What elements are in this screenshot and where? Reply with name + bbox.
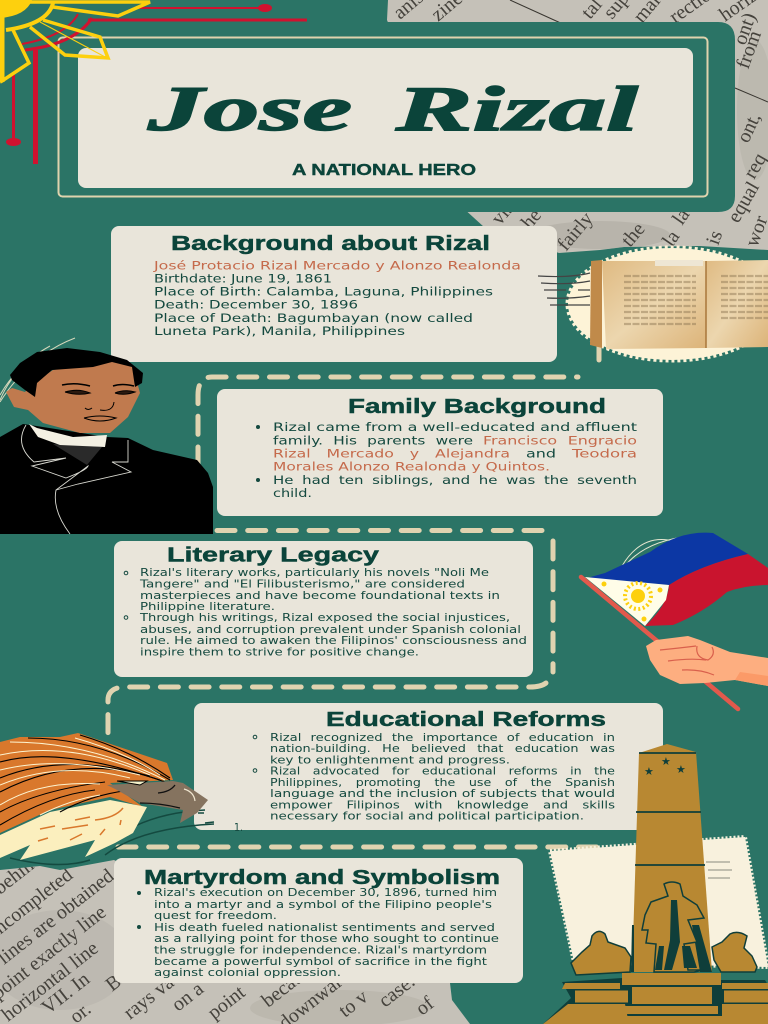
martyrdom text: Rizal's execution on December 30, 1896, turned him	[154, 887, 497, 899]
statue of Rizal	[631, 882, 712, 972]
title frame	[58, 38, 708, 196]
panel: background about Rizal	[111, 226, 557, 362]
title: Rizal	[394, 73, 638, 144]
educational text: Philippines, promoting the use of the Spanish	[270, 777, 615, 789]
sun rays icon	[0, 0, 150, 82]
torn newspaper: bottom left: of	[412, 992, 438, 1020]
dashed connector lines	[108, 342, 600, 847]
literary text: Rizal's literary works, particularly his novels "Noli Me	[140, 567, 489, 579]
family text: child.	[273, 486, 312, 500]
heading: literary: Literary Legacy	[167, 544, 380, 566]
literary text: inspire them to strive for positive change.	[140, 646, 419, 658]
illustration: eagle	[0, 733, 214, 865]
torn newspaper: bottom left: on a	[168, 978, 208, 1016]
torn newspaper: bottom left: point	[204, 981, 250, 1024]
torn newspaper: top right: ont)	[729, 10, 761, 48]
torn newspaper: top right: equal	[723, 178, 764, 226]
seated figure right	[712, 932, 757, 972]
educational text: Rizal recognized the importance of education in	[270, 732, 615, 744]
martyrdom text: the struggle for independence. Rizal's martyrdom	[154, 944, 487, 956]
birth and death facts: Place of Birth: Calamba, Laguna, Philippines	[154, 284, 493, 298]
torn newspaper: bottom left: rays va	[120, 971, 178, 1024]
torn newspaper: bottom left	[0, 848, 470, 1024]
torn newspaper: bottom left: VII. In	[38, 968, 94, 1019]
educational text: nation-building. He believed that education was	[270, 743, 615, 755]
martyrdom text: His death fueled nationalist sentiments and served	[154, 922, 495, 934]
torn newspaper: top right: the	[617, 218, 650, 251]
illustration: Philippine flag and hand	[581, 533, 768, 709]
birth and death facts: Death: December 30, 1896	[154, 298, 358, 312]
red decorative lines	[6, 4, 307, 164]
birth and death facts: Place of Death: Bagumbayan (now called	[154, 311, 473, 325]
pedestal	[543, 973, 768, 1024]
torn newspaper: top right: la	[658, 226, 684, 251]
family text: family. His parents were	[273, 434, 473, 448]
educational text: empower Filipinos with knowledge and skills	[270, 800, 615, 812]
heading: educational: Educational Reforms	[326, 709, 606, 731]
family text: Rizal Mercado y Alejandra	[273, 446, 510, 460]
title panel	[78, 48, 693, 188]
title	[146, 73, 638, 144]
martyrdom text: into a martyr and a symbol of the Filipino people's	[154, 899, 492, 911]
heading: martyrdom: Martyrdom and Symbolism	[144, 867, 500, 889]
panel: family background	[217, 389, 663, 516]
illustration: monument with stamp paper: ★	[644, 765, 654, 778]
literary text: Philippine literature.	[140, 601, 275, 613]
torn newspaper: bottom left: to v	[335, 986, 372, 1022]
martyrdom text: as a rallying point for those who sought to continue	[154, 933, 499, 945]
illustration: monument with stamp paper: ★	[676, 763, 686, 776]
teal title backing	[0, 22, 735, 230]
illustration: monument with stamp paper: ★	[661, 755, 671, 768]
educational text: key to enlightenment and progress.	[270, 754, 510, 766]
martyrdom text	[137, 887, 499, 979]
panel: martyrdom and symbolism	[114, 858, 523, 983]
educational text: language and the inclusion of subjects that would	[270, 788, 615, 800]
full name: José Protacio Rizal Mercado y Alonzo Realonda	[153, 258, 521, 272]
family text: Morales Alonzo Realonda y Quintos.	[273, 460, 550, 474]
seated figure left	[571, 931, 631, 975]
literary text: Tangere" and "El Filibusterismo," are considered	[139, 578, 465, 590]
family text: Francisco Engracio	[483, 434, 637, 448]
family text	[256, 420, 638, 500]
panel: educational reforms	[194, 703, 663, 834]
martyrdom text: against colonial oppression.	[154, 967, 341, 979]
martyrdom text: quest for freedom.	[154, 910, 277, 922]
illustration: Rizal portrait	[0, 338, 213, 534]
torn newspaper: top right: law	[668, 192, 703, 229]
illustration: monument with stamp paper	[543, 744, 768, 1024]
torn newspaper: bottom left: becau	[258, 966, 308, 1012]
literary text	[124, 567, 527, 658]
family text: Rizal came from a well-educated and affluent	[273, 420, 638, 434]
family text: Teodora	[571, 446, 637, 460]
subtitle: A NATIONAL HERO	[292, 162, 476, 179]
icon: open book	[538, 248, 768, 360]
torn newspaper: top right: is	[702, 227, 727, 248]
literary text: masterpieces and have become foundational texts in	[140, 590, 500, 602]
birth and death facts: Birthdate: June 19, 1861	[154, 272, 332, 286]
heading: family: Family Background	[348, 396, 606, 418]
torn newspaper: top right: he	[517, 205, 546, 233]
torn newspaper: top right: ont,	[733, 109, 765, 146]
family text: and	[526, 446, 556, 460]
martyrdom text: became a powerful symbol of sacrifice in the fight	[154, 956, 487, 968]
torn newspaper: bottom left: case.	[375, 970, 419, 1012]
torn newspaper: bottom left: Be	[102, 965, 133, 996]
educational text: necessary for social and political participation.	[270, 810, 584, 822]
birth and death facts: Luneta Park), Manila, Philippines	[154, 324, 405, 338]
title: Jose	[146, 73, 352, 144]
birth and death facts	[154, 272, 493, 338]
torn newspaper: top right	[387, 0, 768, 255]
educational text	[234, 732, 615, 834]
educational text: Rizal advocated for educational reforms in the	[270, 766, 615, 778]
literary text: abuses, and corruption prevalent under Spanish colonial	[140, 624, 521, 636]
panel: literary legacy	[114, 541, 533, 677]
torn newspaper: top right: from	[732, 27, 766, 72]
literary text: rule. He aimed to awaken the Filipinos' consciousness and	[140, 635, 527, 647]
family text: He had ten siblings, and he was the seventh	[273, 473, 637, 487]
literary text: Through his writings, Rizal exposed the social injustices,	[139, 612, 510, 624]
torn newspaper: top right: vis	[487, 197, 519, 229]
torn newspaper: top right: fairly	[553, 208, 598, 255]
educational text: 1.	[234, 822, 243, 834]
heading: background: Background about Rizal	[171, 233, 490, 255]
